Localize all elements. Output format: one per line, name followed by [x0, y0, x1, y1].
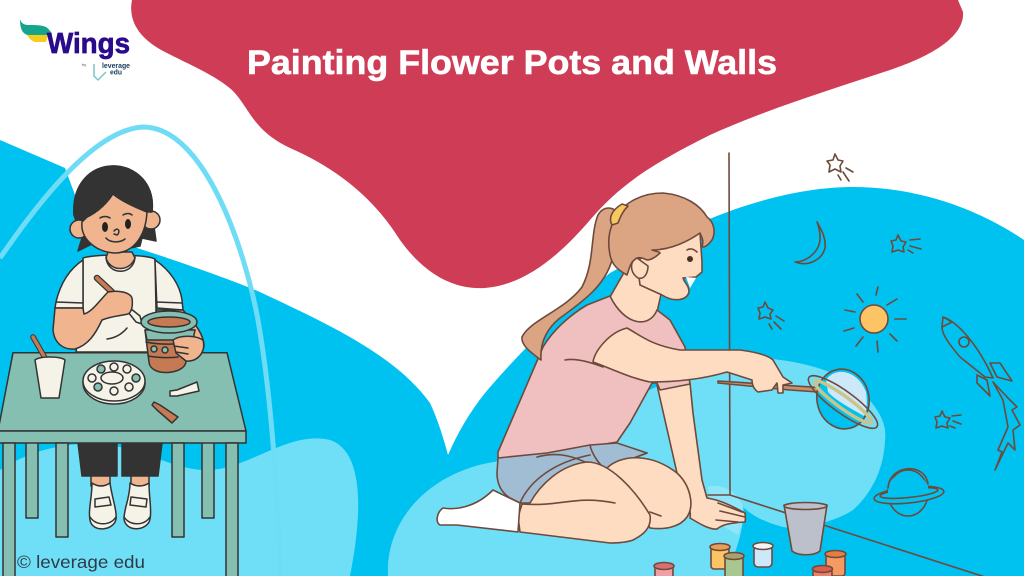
- face: [637, 233, 702, 300]
- table top: [0, 353, 246, 576]
- logo wordmark: Wings: [47, 28, 130, 60]
- table legs back and shorts: [26, 442, 214, 518]
- wall drawing: star right upper: [891, 235, 921, 253]
- leg crease: [522, 500, 661, 516]
- logo: Wings by leverage edu: [20, 19, 130, 80]
- right arm: [156, 310, 204, 360]
- shoes: [89, 483, 151, 529]
- left arm and hand: [53, 291, 132, 349]
- torso and shirt: [76, 252, 160, 352]
- illustration: boy painting a flower pot: [0, 166, 246, 576]
- background: light blue floor left: [0, 438, 358, 576]
- eye and ear: [632, 249, 697, 288]
- paint tube brown: [152, 402, 178, 423]
- leverage edu mark: [94, 64, 106, 80]
- supporting arm and hand: [657, 383, 745, 529]
- leverage edu text second line: edu: [110, 70, 122, 76]
- jar yellow: [710, 544, 730, 569]
- flower pot: [141, 311, 197, 373]
- background: blue blobs: [0, 140, 1024, 576]
- shorts: [497, 443, 647, 503]
- water cup with brush: [33, 337, 65, 398]
- planet being painted: [803, 364, 883, 436]
- sock: [437, 490, 520, 532]
- jar orange: [825, 550, 846, 576]
- paint cup: [784, 502, 827, 555]
- wall drawing: star right lower: [935, 411, 961, 428]
- paint brush: [718, 381, 842, 393]
- hand on pot: [173, 336, 204, 361]
- jar green: [724, 552, 744, 576]
- far knee: [607, 458, 691, 529]
- hair back tufts: [74, 166, 156, 251]
- jar pale blue: [753, 542, 773, 567]
- wall drawing: ringed planet: [873, 469, 945, 516]
- face and ears: [70, 166, 160, 253]
- red title blob: [131, 0, 963, 288]
- paint palette: [83, 361, 145, 404]
- jar red: [812, 566, 832, 576]
- background: pale spot near the hand: [708, 486, 744, 535]
- leverage edu text: leverage: [102, 63, 130, 70]
- wall drawing: star top: [827, 154, 853, 181]
- painting arm and hand: [593, 328, 792, 393]
- paint tube white: [170, 382, 199, 396]
- neck: [610, 262, 662, 323]
- background: light blue floor and wall patch right: [388, 354, 885, 576]
- hair: [609, 193, 714, 275]
- wall drawing: rocket with flame: [942, 317, 1020, 470]
- sleeves: [55, 260, 183, 310]
- wall drawing: sun: [844, 287, 906, 352]
- logo swoosh: [20, 19, 52, 42]
- copyright credit: © leverage edu: [17, 552, 145, 572]
- scrunchie: [610, 204, 628, 225]
- decorative arc outline: [0, 127, 280, 576]
- hand finger lines: [716, 503, 745, 522]
- logo byline: by: [82, 62, 86, 67]
- wall drawing: crescent moon: [795, 222, 825, 264]
- title: Painting Flower Pots and Walls: [247, 44, 777, 82]
- jar pink: [654, 562, 674, 576]
- brush in hand: [97, 278, 142, 324]
- ponytail: [522, 208, 617, 360]
- paint jars: [654, 542, 846, 576]
- shorts details: [520, 445, 647, 503]
- arm crease: [565, 359, 603, 367]
- near thigh and shin: [518, 462, 650, 543]
- wall drawing: star left: [758, 302, 784, 329]
- illustration: girl painting the wall: [437, 193, 842, 543]
- t-shirt: [498, 296, 690, 458]
- wall and floor lines: [708, 153, 985, 576]
